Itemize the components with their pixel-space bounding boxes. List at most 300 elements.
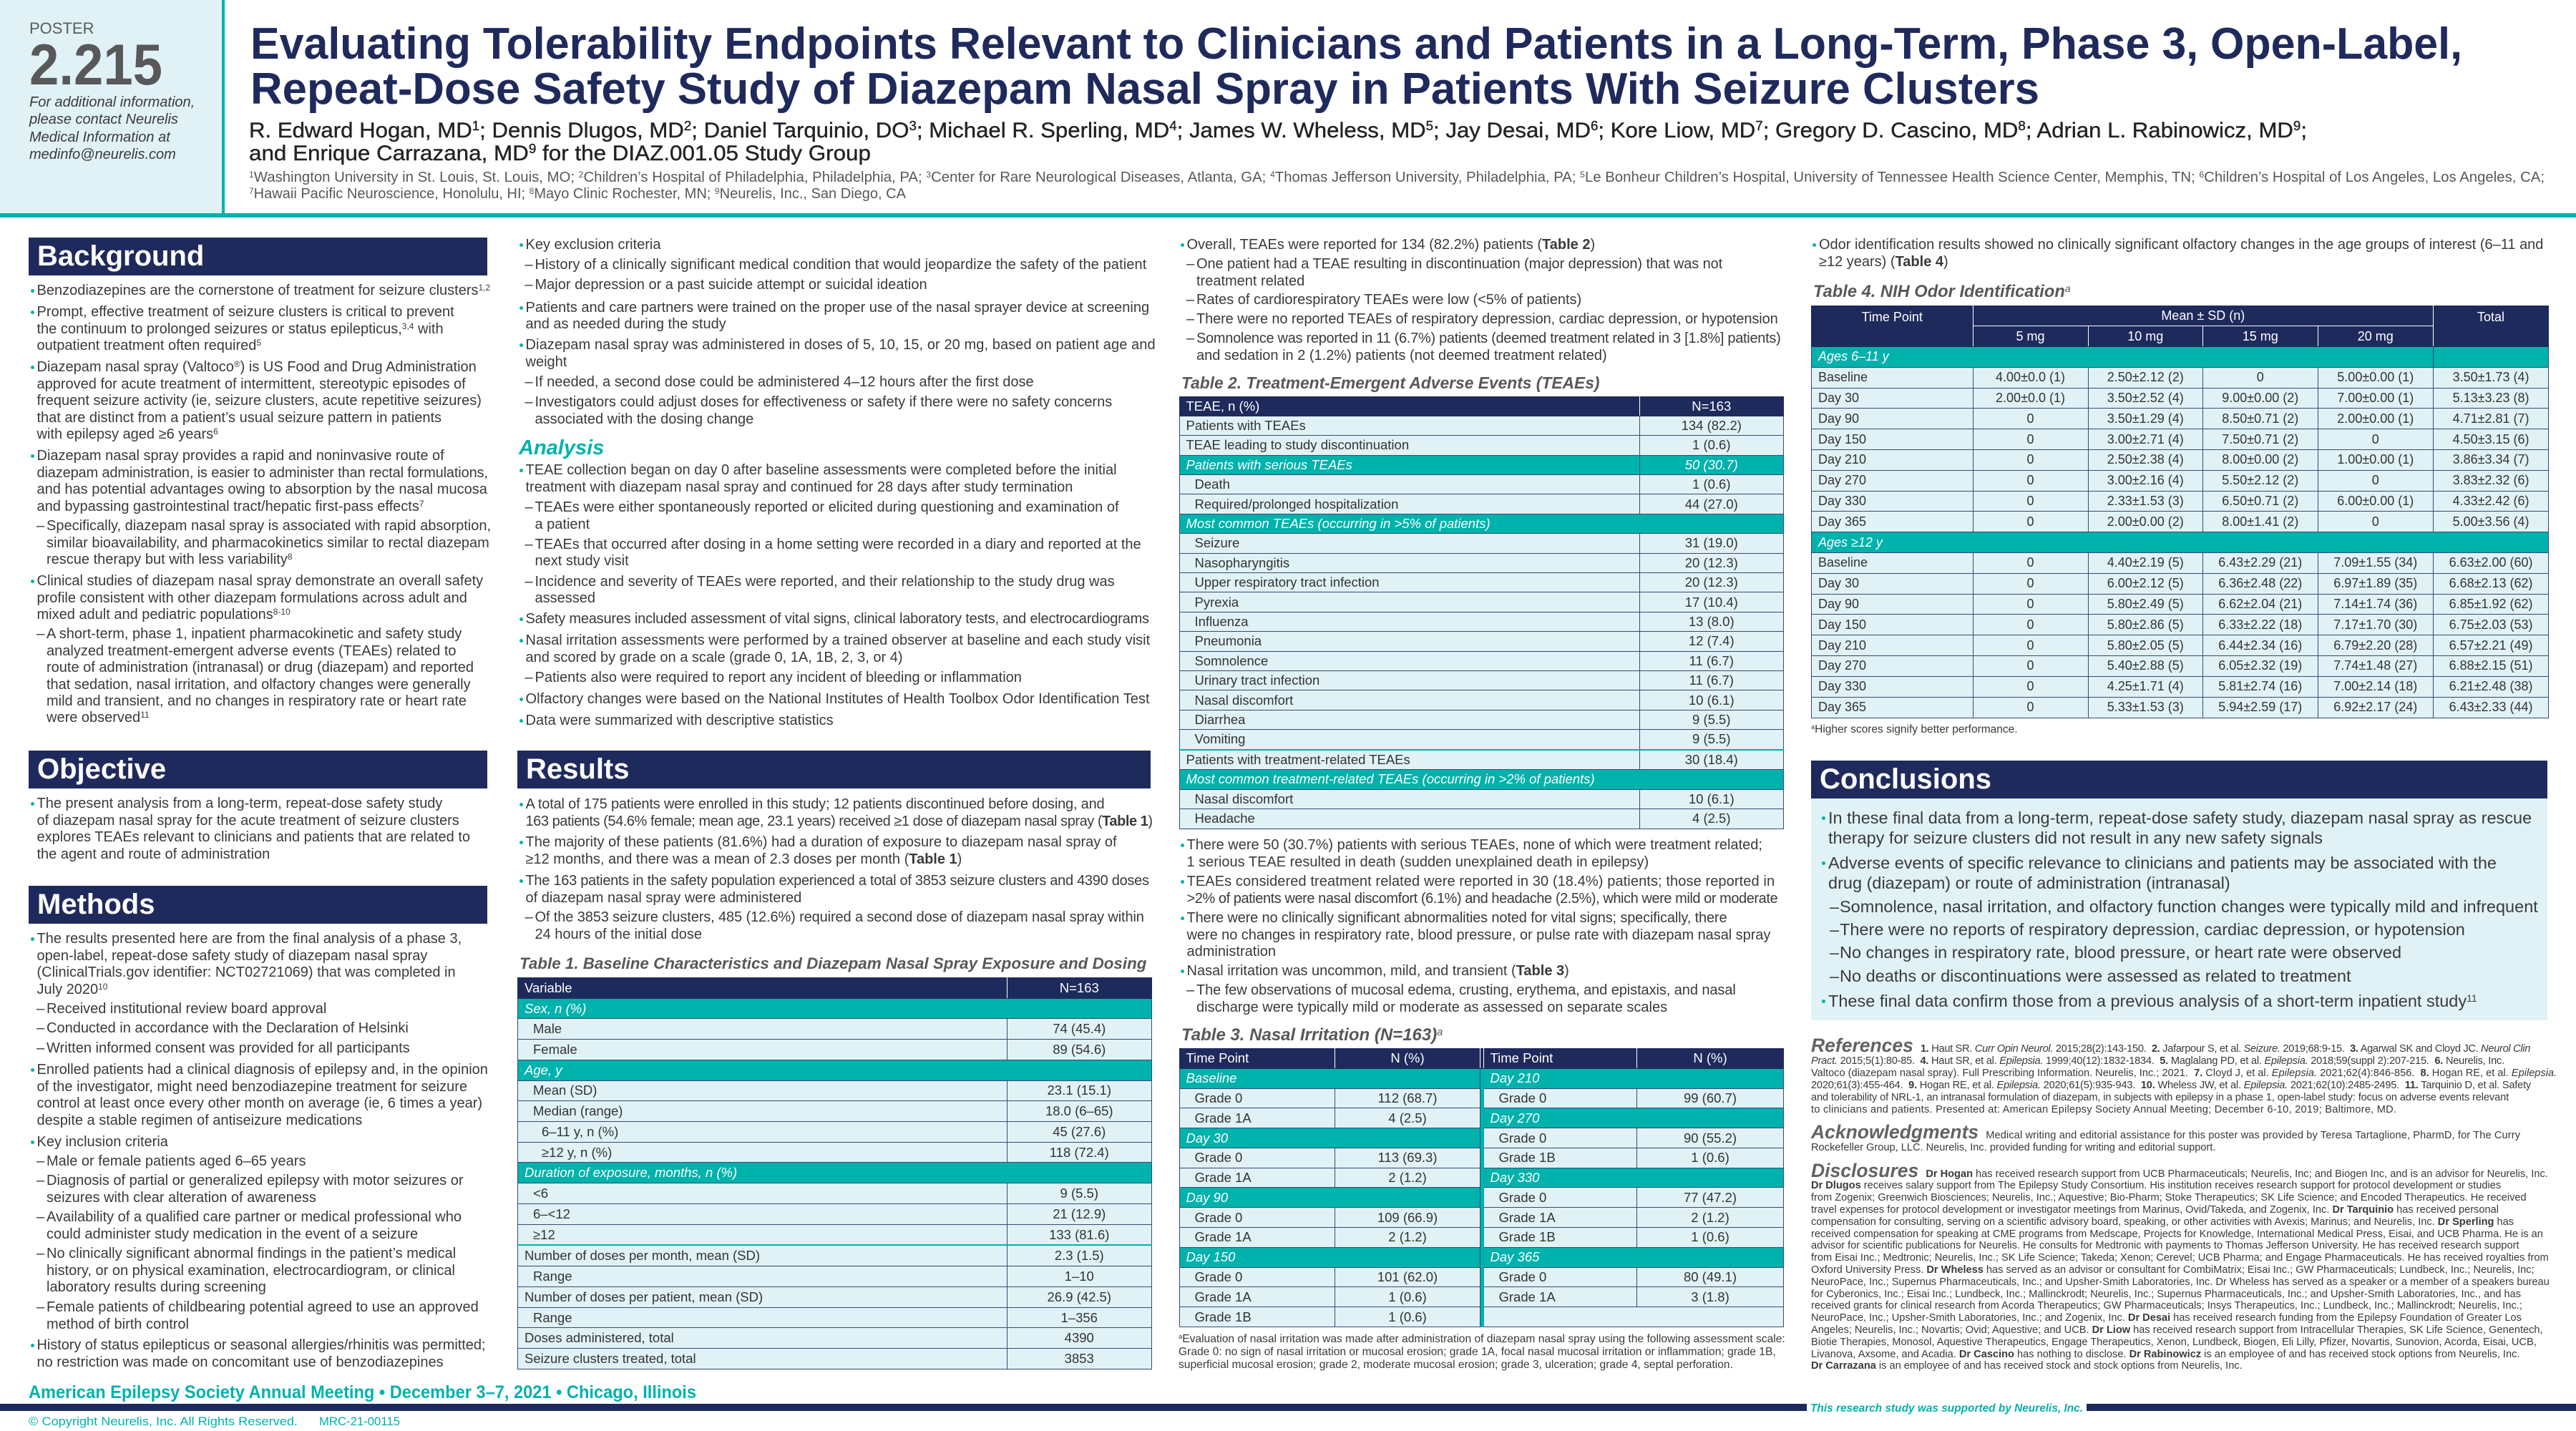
affiliations: Children’s Hospital of Los Angeles, Los Angeles, CA;: [2204, 170, 2545, 185]
table 2: TEAEs: 134 (82.2): [1682, 418, 1742, 433]
text block: Disclosures: Biotie Therapies, Monosol, Aquestive Therapeutics, Engage Therapeutics, Xenon, Lundbeck, Biogen, Eli Lilly, Pfizer, Novartis, Sunovion, Acorda, Eisai, UCB,: [1811, 1337, 2537, 1348]
text block: Background: the continuum to prolonged seizures or status epilepticus,3,4 with: [37, 321, 444, 337]
text block: Methods: laboratory results during screening: [47, 1279, 266, 1295]
text block: Analysis: Olfactory changes were based on the National Institutes of Health Toolbox Odor Identification Test: [525, 691, 1150, 707]
table 1: baseline characteristics: Number of doses per patient, mean (SD): [525, 1289, 763, 1304]
table 2: TEAEs: 4 (2.5): [1692, 811, 1730, 826]
table 1: baseline characteristics: 23.1 (15.1): [1048, 1083, 1111, 1098]
text block: TEAE overview: and sedation in 2 (1.2%) patients (not deemed treatment related): [1196, 348, 1607, 363]
table 4: NIH odor identification: 6.00±0.00 (1): [2337, 494, 2414, 508]
text block: Methods: method of birth control: [47, 1317, 189, 1332]
text block: odor identification: Odor identification results showed no clinically significant olfactory changes in the age groups of interest (6–11 and: [1819, 237, 2543, 253]
table 1: baseline characteristics: Number of doses per month, mean (SD): [525, 1248, 760, 1263]
table 4: NIH odor identification: Day 365: [1818, 700, 1866, 714]
text block: Analysis: Patients also were required to report any incident of bleeding or inflammation: [535, 670, 1022, 685]
authors: for the DIAZ.001.05 Study Group: [536, 142, 871, 165]
table 3: nasal irritation: Grade 0: [1195, 1269, 1242, 1284]
text block: Acknowledgments: Acknowledgments Medical writing and editorial assistance for this poster was provided by Teresa Tartaglione, PharmD, for The Curry: [1811, 1120, 2520, 1142]
table 3: nasal irritation: 3 (1.8): [1691, 1289, 1729, 1304]
table 3: nasal irritation: Time Point: [1490, 1050, 1553, 1065]
table 4: NIH odor identification: 6.63±2.00 (60): [2449, 555, 2533, 570]
table 4: NIH odor identification: 6.50±0.71 (2): [2222, 494, 2298, 508]
text block: TEAE details: There were no clinically significant abnormalities noted for vital signs; specifically, there: [1186, 910, 1727, 926]
text block: Methods: [31, 931, 488, 1370]
table 1: baseline characteristics: ≥12 y, n (%): [542, 1145, 612, 1160]
authors: R. Edward Hogan, MD: [249, 119, 464, 142]
text block: Background: Specifically, diazepam nasal spray is associated with rapid absorption,: [47, 518, 491, 534]
table 3: nasal irritation: Grade 0: [1498, 1269, 1546, 1284]
authors: ;: [2301, 119, 2307, 142]
table 4: NIH odor identification: Day 90: [1818, 597, 1859, 611]
text block: Background: with epilepsy aged ≥6 years6: [37, 426, 218, 442]
heading: Objective: [29, 751, 487, 788]
header text: [249, 19, 2545, 202]
table 4: NIH odor identification: 6.68±2.13 (62): [2449, 576, 2533, 590]
table 4: NIH odor identification: 4.40±2.19 (5): [2107, 555, 2184, 570]
text block: Background: approved for acute treatment of intermittent, stereotypic episodes of: [37, 376, 466, 392]
table 4: NIH odor identification: Day 330: [1818, 494, 1866, 508]
text block: Methods continued: [519, 237, 1156, 427]
table 4: NIH odor identification: Baseline: [1818, 370, 1868, 384]
table 2: TEAEs: Nasal discomfort: [1195, 791, 1293, 806]
table 4: NIH odor identification: 3.50±1.73 (4): [2453, 370, 2529, 384]
table 4: NIH odor identification: Day 330: [1818, 679, 1866, 693]
authors: ; Daniel Tarquinio, DO: [691, 119, 909, 142]
table 3: nasal irritation: 99 (60.7): [1684, 1090, 1737, 1105]
affiliations: Neurelis, Inc., San Diego, CA: [720, 186, 907, 202]
table 4: NIH odor identification: Day 150: [1818, 432, 1866, 446]
table 4: NIH odor identification: 5.94±2.59 (17): [2218, 700, 2302, 714]
table 2: TEAEs: Most common TEAEs (occurring in >5% of patients): [1186, 516, 1491, 531]
authors: 4: [1169, 119, 1177, 133]
table 3: nasal irritation: Grade 1A: [1195, 1170, 1252, 1185]
text block: References: References 1. Haut SR. Curr Opin Neurol. 2015;28(2):143-150. 2. Jafarpour S, et al. Seizure. 2019;68:9-15. 3. Agarwal SK and Cloyd JC. Neurol Clin: [1811, 1035, 2530, 1056]
table 4: NIH odor identification: 6.92±2.17 (24): [2333, 700, 2417, 714]
affiliations: 8: [530, 186, 535, 196]
authors: ; James W. Wheless, MD: [1177, 119, 1426, 142]
text block: odor identification: ≥12 years) (Table 4): [1819, 254, 1948, 270]
text block: Disclosures: Disclosures Dr Hogan has received research support from UCB Pharmaceuticals; Neurelis, Inc; and Biogen Inc, and is an advisor for Neurelis, Inc.: [1811, 1160, 2548, 1181]
table 1: baseline characteristics: 118 (72.4): [1050, 1145, 1109, 1160]
affiliations: Children’s Hospital of Philadelphia, Philadelphia, PA;: [583, 170, 926, 185]
text block: Objective: explores TEAEs relevant to clinicians and patients that are related to: [37, 829, 470, 845]
text block: TEAE overview: Rates of cardiorespiratory TEAEs were low (<5% of patients): [1196, 292, 1581, 308]
table 1: baseline characteristics: 74 (45.4): [1053, 1021, 1106, 1036]
table 4: NIH odor identification: Day 30: [1818, 391, 1859, 405]
table 1: baseline characteristics: Mean (SD): [533, 1083, 597, 1098]
text block: Disclosures: for Cyberonics, Inc.; Eisai Inc.; Lundbeck, Inc.; Mallinckrodt; Neurelis, Inc.; Supernus Pharmaceuticals, Inc.; and Upsher-Smith Laboratories, Inc., and has: [1811, 1289, 2521, 1300]
table 2: TEAEs: Patients with TEAEs: [1186, 418, 1306, 433]
table 1: baseline characteristics: 2.3 (1.5): [1055, 1248, 1104, 1263]
text block: Background: Prompt, effective treatment of seizure clusters is critical to prevent: [37, 304, 454, 320]
text block: Background: mild and transient, and no changes in respiratory rate or heart rate: [47, 693, 467, 709]
table 4: NIH odor identification: 2.50±2.38 (4): [2107, 452, 2184, 467]
text block: Results: [519, 796, 1153, 942]
text block: Methods: July 202010: [37, 982, 107, 997]
text block: Background: that sedation, nasal irritation, and olfactory changes were generally: [47, 677, 471, 693]
table 2: TEAEs: 30 (18.4): [1685, 752, 1738, 767]
table 1: baseline characteristics: 21 (12.9): [1053, 1206, 1106, 1221]
table 4: NIH odor identification: 6.33±2.22 (18): [2218, 617, 2302, 632]
table 3: nasal irritation: N (%): [1693, 1050, 1727, 1065]
table 2: TEAEs: Headache: [1195, 811, 1255, 826]
affiliations: 2: [579, 170, 584, 180]
table 4: NIH odor identification: 0: [2026, 679, 2034, 693]
table 2: TEAEs: Somnolence: [1195, 653, 1268, 668]
text block: TEAE details: There were 50 (30.7%) patients with serious TEAEs, none of which were treatment related;: [1186, 837, 1762, 853]
table 4: NIH odor identification: 5.80±2.86 (5): [2107, 617, 2184, 632]
panel: Conclusions: In these final data from a long-term, repeat-dose safety study, diazepam nasal spray as rescue: [1828, 809, 2532, 827]
text block: Background: frequent seizure activity (ie, seizure clusters, acute repetitive seizures): [37, 393, 482, 409]
table 1: baseline characteristics: Median (range): [533, 1103, 623, 1118]
table 4: NIH odor identification: 6.36±2.48 (22): [2218, 576, 2302, 590]
table 4: NIH odor identification: Baseline: [1818, 555, 1868, 570]
table 3: nasal irritation: Grade 1A: [1498, 1210, 1556, 1225]
table 1: baseline characteristics: Sex, n (%): [525, 1001, 586, 1016]
affiliations: Center for Rare Neurological Diseases, Atlanta, GA;: [931, 170, 1270, 185]
text block: Disclosures: compensation for consulting, serving on a scientific advisory board, speaking, or other activities with Avexis; Marinus; and Neurelis, Inc. Dr Sperling has: [1811, 1216, 2514, 1228]
table 4: NIH odor identification: 6.88±2.15 (51): [2449, 658, 2533, 673]
text block: Methods: Female patients of childbearing potential agreed to use an approved: [47, 1299, 479, 1315]
text block: Objective: of diazepam nasal spray for the acute treatment of seizure clusters: [37, 813, 459, 829]
table 1: baseline characteristics: <6: [533, 1186, 548, 1201]
table 4: NIH odor identification: 6.43±2.29 (21): [2218, 555, 2302, 570]
caption: Table 3: Table 3. Nasal Irritation (N=163)a: [1181, 1025, 1443, 1045]
table 4: NIH odor identification: 10 mg: [2127, 329, 2163, 343]
table 2: TEAEs: 10 (6.1): [1689, 791, 1735, 806]
table 3: nasal irritation: Grade 0: [1195, 1090, 1242, 1105]
table 3: nasal irritation: 2 (1.2): [1691, 1210, 1729, 1225]
table 1: baseline characteristics: Variable: [525, 980, 572, 995]
table 1: baseline characteristics: 89 (54.6): [1053, 1042, 1106, 1057]
text block: Disclosures: from Zogenix; Greenwich Biosciences; Neurelis, Inc.; Aquestive; Bio-Pharm; Stoke Therapeutics; SK Life Science; and Encoded Therapeutics. He received: [1811, 1192, 2527, 1203]
table 3: nasal irritation: N (%): [1390, 1050, 1425, 1065]
authors: ; Kore Liow, MD: [1598, 119, 1755, 142]
contact note: please contact Neurelis: [29, 112, 178, 127]
affiliations: Mayo Clinic Rochester, MN;: [534, 186, 715, 202]
text block: Methods: history, or on physical examination, electrocardiogram, or clinical: [47, 1263, 455, 1279]
table 1: baseline characteristics: Range: [533, 1269, 572, 1284]
authors: and Enrique Carrazana, MD: [249, 142, 517, 165]
text block: Disclosures: received grants for clinical research from Acorda Therapeutics; GW Pharmaceuticals; Insys Therapeutics, Inc.; Lundbeck, Inc.; Mallinckrodt; Neurelis, Inc.;: [1811, 1300, 2522, 1312]
table 4: NIH odor identification: 0: [2026, 576, 2034, 590]
panel: Conclusions: No deaths or discontinuations were assessed as related to treatment: [1840, 967, 2351, 985]
text block: Analysis: assessed: [535, 590, 595, 606]
table 4: NIH odor identification: 0: [2026, 432, 2034, 446]
table 3: nasal irritation: 1 (0.6): [1691, 1150, 1729, 1165]
text block: References: Pract. 2015;5(1):80-85. 4. Haut SR, et al. Epilepsia. 1999;40(12):1832-1834. 5. Maglalang PD, et al. Epilepsia. 2018;59(suppl 2):207-215. 6. Neurelis, Inc.: [1811, 1055, 2504, 1066]
text block: Background: outpatient treatment often required5: [37, 338, 261, 353]
text block: Analysis: [519, 462, 1151, 728]
table 2: TEAEs: 20 (12.3): [1685, 555, 1738, 570]
text block: Methods continued: Key exclusion criteria: [525, 237, 660, 253]
text block: References: Valtoco (diazepam nasal spray). Full Prescribing Information. Neurelis, Inc.; 2021. 7. Cloyd J, et al. Epilepsia. 2021;62(4):846-856. 8. Hogan RE, et al. Epilepsia.: [1811, 1068, 2557, 1079]
caption: Table 2: Table 2. Treatment-Emergent Adverse Events (TEAEs): [1181, 373, 1599, 392]
text block: TEAE overview: One patient had a TEAE resulting in discontinuation (major depression) that was not: [1196, 256, 1722, 272]
table 2: TEAEs: Urinary tract infection: [1195, 673, 1319, 688]
text block: Methods continued: and as needed during the study: [525, 316, 726, 332]
table 1: baseline characteristics: 26.9 (42.5): [1048, 1289, 1111, 1304]
text block: Analysis: and scored by grade on a scale (grade 0, 1A, 1B, 2, 3, or 4): [525, 650, 902, 665]
footer: copyright: © Copyright Neurelis, Inc. All Rights Reserved.: [29, 1415, 298, 1428]
table 4: NIH odor identification: Mean ± SD (n): [2161, 308, 2245, 323]
table 4: NIH odor identification: 6.62±2.04 (21): [2218, 597, 2302, 611]
table 4: NIH odor identification: Day 30: [1818, 576, 1859, 590]
authors: 9: [529, 142, 536, 156]
table 4: NIH odor identification: 6.05±2.32 (19): [2218, 658, 2302, 673]
table 3: nasal irritation: 112 (68.7): [1378, 1090, 1437, 1105]
table 4: NIH odor identification: 6.79±2.20 (28): [2333, 638, 2417, 653]
table 4: NIH odor identification: 0: [2026, 411, 2034, 426]
text block: Methods: (ClinicalTrials.gov identifier: NCT02721069) that was completed in: [37, 964, 456, 980]
table 3: nasal irritation: Day 330: [1490, 1170, 1539, 1185]
text block: Methods continued: Diazepam nasal spray was administered in doses of 5, 10, 15, or 20 mg, based on patient age and: [525, 337, 1156, 353]
table 1: baseline characteristics: ≥12: [533, 1227, 555, 1242]
caption: Table 1: Table 1. Baseline Characteristics and Diazepam Nasal Spray Exposure and Dosing: [519, 954, 1146, 972]
table 4: NIH odor identification: 3.50±1.29 (4): [2107, 411, 2184, 426]
table 3: nasal irritation: Grade 1A: [1195, 1289, 1252, 1304]
table 2: TEAEs: Required/prolonged hospitalization: [1195, 497, 1398, 512]
table 3: nasal irritation: Day 270: [1490, 1110, 1539, 1125]
table 3: nasal irritation: Day 30: [1186, 1130, 1228, 1146]
text block: TEAE details: discharge were typically mild or moderate as assessed on separate scales: [1196, 1000, 1667, 1015]
authors: 8: [2018, 119, 2026, 133]
table 4: NIH odor identification: 3.83±2.32 (6): [2453, 473, 2529, 487]
table 4: NIH odor identification: Day 210: [1818, 638, 1866, 653]
table 3: nasal irritation: 90 (55.2): [1684, 1130, 1737, 1146]
text block: Background: Diazepam nasal spray provides a rapid and noninvasive route of: [37, 448, 444, 464]
table 3: nasal irritation: 1 (0.6): [1691, 1229, 1729, 1244]
text block: Methods: Received institutional review board approval: [47, 1001, 326, 1017]
table 1: baseline characteristics: 133 (81.6): [1049, 1227, 1109, 1242]
table 4: NIH odor identification: Total: [2477, 309, 2504, 323]
contact note: [29, 94, 195, 162]
table 2: TEAEs: Nasopharyngitis: [1195, 555, 1289, 570]
text block: References: [1811, 1035, 2557, 1115]
affiliations: 7: [249, 186, 254, 196]
text block: TEAE overview: Overall, TEAEs were reported for 134 (82.2%) patients (Table 2): [1186, 237, 1595, 253]
authors: [249, 119, 2307, 165]
affiliations: 1: [249, 170, 254, 180]
text block: Results: The majority of these patients (81.6%) had a duration of exposure to diazepam nasal spray of: [525, 834, 1117, 850]
text block: Background: similar bioavailability, and pharmacokinetics similar to rectal diazepam: [47, 535, 489, 551]
authors: 6: [1591, 119, 1598, 133]
footer: funding note: This research study was supported by Neurelis, Inc.: [1810, 1402, 2083, 1415]
footnote: Table 3: [1179, 1333, 1785, 1371]
text block: Background: Diazepam nasal spray (Valtoco®) is US Food and Drug Administration: [37, 359, 477, 375]
table 2: TEAEs: 9 (5.5): [1692, 712, 1730, 727]
table 4: NIH odor identification: 0: [2257, 370, 2264, 384]
table 3: nasal irritation: [1179, 1048, 1784, 1327]
text block: Methods continued: Investigators could adjust doses for effectiveness or safety if there were no safety concerns: [535, 394, 1112, 410]
authors: ; Jay Desai, MD: [1433, 119, 1591, 142]
table 1: baseline characteristics: 1–10: [1065, 1269, 1094, 1284]
text block: TEAE overview: treatment related: [1196, 273, 1304, 289]
table 4: NIH odor identification: Day 270: [1818, 658, 1866, 673]
table 1: baseline characteristics: Age, y: [525, 1063, 562, 1078]
text block: TEAE details: TEAEs considered treatment related were reported in 30 (18.4%) patients; those reported in: [1186, 874, 1775, 889]
footer bar left: [0, 1404, 1807, 1411]
table 1: baseline characteristics: [517, 977, 1152, 1369]
table 3: nasal irritation: Grade 1B: [1498, 1229, 1556, 1244]
text block: Results: A total of 175 patients were enrolled in this study; 12 patients discontinued before dosing, and: [525, 796, 1104, 812]
table 2: TEAEs: Influenza: [1195, 614, 1249, 629]
table 4: NIH odor identification: 6.85±1.92 (62): [2449, 597, 2533, 611]
text block: Background: were observed11: [47, 710, 150, 726]
text block: TEAE details: 1 serious TEAE resulted in death (sudden unexplained death in epilepsy): [1186, 854, 1649, 870]
table 4: NIH odor identification: 8.50±0.71 (2): [2222, 411, 2298, 426]
text block: Results: 24 hours of the initial dose: [535, 927, 702, 942]
table 3: nasal irritation: Day 365: [1490, 1249, 1539, 1264]
text block: Methods: seizures with clear alteration of awareness: [47, 1190, 316, 1206]
affiliations: Hawaii Pacific Neuroscience, Honolulu, HI;: [254, 186, 530, 202]
table 4: NIH odor identification: 3.86±3.34 (7): [2453, 452, 2529, 467]
table 4: NIH odor identification: 0: [2026, 473, 2034, 487]
text block: Results: 163 patients (54.6% female; mean age, 23.1 years) received ≥1 dose of diazepam nasal spray (Table 1): [525, 814, 1153, 829]
footnote: Table 3: Grade 0: no sign of nasal irritation or mucosal erosion; grade 1A, focal nasal mucosal irritation or inflammation; grade 1B,: [1179, 1346, 1776, 1358]
table 4: NIH odor identification: 0: [2026, 494, 2034, 508]
table 2: TEAEs: 1 (0.6): [1692, 437, 1730, 452]
text block: Disclosures: NeuroPace, Inc.; Supernus Pharmaceuticals, Inc.; and Upsher-Smith Laboratories, Inc. Dr Wheless has served as a speaker or a member of a speakers bureau: [1811, 1276, 2550, 1288]
text block: Analysis: treatment with diazepam nasal spray and continued for 28 days after study termination: [525, 479, 1073, 495]
panel: Conclusions: These final data confirm those from a previous analysis of a short-term inpatient study11: [1828, 992, 2477, 1010]
table 4: NIH odor identification: 0: [2026, 514, 2034, 529]
panel: Conclusions: therapy for seizure clusters did not result in any new safety signals: [1828, 829, 2323, 847]
text block: Methods: Key inclusion criteria: [37, 1134, 168, 1150]
table 4: NIH odor identification: 7.17±1.70 (30): [2333, 617, 2417, 632]
text block: Disclosures: Oxford University Press. Dr Wheless has served as an advisor or consultant for CombiMatrix; Eisai Inc.; GW Pharmaceuticals; Lundbeck, Inc.; Neurelis, Inc;: [1811, 1264, 2534, 1276]
table 3: nasal irritation: Grade 0: [1498, 1090, 1546, 1105]
table 4: NIH odor identification: 8.00±0.00 (2): [2222, 452, 2298, 467]
text block: TEAE overview: There were no reported TEAEs of respiratory depression, cardiac depression, or hypotension: [1196, 311, 1778, 327]
table 4: NIH odor identification: 0: [2026, 617, 2034, 632]
table 3: nasal irritation: Grade 0: [1498, 1130, 1546, 1146]
table 4: NIH odor identification: 5.81±2.74 (16): [2218, 679, 2302, 693]
authors: 3: [909, 119, 917, 133]
contact note: medinfo@neurelis.com: [29, 147, 176, 162]
text block: References: and tolerability of NRL-1, an intranasal formulation of diazepam, in subjects with epilepsy in a phase 1, open-label study: focus on adverse events relevant: [1811, 1092, 2509, 1103]
table 2: TEAEs: 11 (6.7): [1689, 673, 1734, 688]
table 1: baseline characteristics: N=163: [1060, 980, 1099, 995]
table 4: NIH odor identification: 4.71±2.81 (7): [2453, 411, 2529, 426]
text block: Disclosures: advisor for scientific publications for Neurelis. He consults for Medtronic with payments to Thomas Jefferson University. He has received research support: [1811, 1240, 2519, 1251]
text block: Objective: the agent and route of administration: [37, 846, 270, 862]
text block: Analysis: TEAE collection began on day 0 after baseline assessments were completed before the initial: [525, 462, 1117, 478]
table 4: NIH odor identification: 6.43±2.33 (44): [2449, 700, 2533, 714]
text block: Analysis: next study visit: [535, 553, 629, 569]
text block: Methods continued: associated with the dosing change: [535, 411, 753, 427]
text block: Background: profile consistent with other diazepam formulations across adult and: [37, 590, 467, 606]
footer: copyright: [29, 1412, 408, 1430]
table 2: TEAEs: 1 (0.6): [1692, 477, 1730, 492]
text block: Methods: Written informed consent was provided for all participants: [47, 1040, 410, 1056]
text block: TEAE details: administration: [1186, 944, 1276, 959]
table 4: NIH odor identification: Time Point: [1862, 309, 1923, 323]
poster label: POSTER: [29, 19, 94, 37]
footnote: Table 3: superficial mucosal erosion; grade 2, moderate mucosal erosion; grade 3, ulceration; grade 4, septal perforation.: [1179, 1359, 1733, 1371]
panel: Conclusions: Somnolence, nasal irritation, and olfactory function changes were typically mild and infrequent: [1840, 897, 2538, 916]
table 4: NIH odor identification: 0: [2026, 700, 2034, 714]
affiliations: 6: [2199, 170, 2205, 180]
text block: Disclosures: Angeles; Neurelis, Inc.; Novartis; Ovid; Aquestive; and UCB. Dr Liow has received research support from Intracellular Therapies, SK Life Science, Genentech,: [1811, 1324, 2543, 1336]
text block: Disclosures: received compensation for speaking at CME programs from Medscape, Projects for Knowledge, International Medical Press, Eisai, and UCB Pharma. He is an: [1811, 1229, 2543, 1240]
text block: Disclosures: NeuroPace, Inc.; Upsher-Smith Laboratories, Inc.; and Zogenix, Inc. Dr Desai has received research funding from the Epilepsy Foundation of Greater Los: [1811, 1312, 2522, 1324]
text block: Objective: The present analysis from a long-term, repeat-dose safety study: [37, 796, 442, 811]
table 4: NIH odor identification: Day 150: [1818, 617, 1866, 632]
authors: ; Dennis Dlugos, MD: [479, 119, 684, 142]
table 4: NIH odor identification: Ages 6–11 y: [1818, 349, 1889, 363]
table 4: NIH odor identification: 6.44±2.34 (16): [2218, 638, 2302, 653]
panel: Conclusions: drug (diazepam) or route of administration (intranasal): [1828, 874, 2230, 892]
text block: Methods continued: History of a clinically significant medical condition that would jeopardize the safety of the patient: [535, 257, 1146, 273]
table 3: nasal irritation: 113 (69.3): [1378, 1150, 1437, 1165]
table 4: NIH odor identification: 0: [2026, 638, 2034, 653]
table 4: NIH odor identification: 4.33±2.42 (6): [2453, 494, 2529, 508]
table 4: NIH odor identification: 0: [2026, 597, 2034, 611]
heading: Objective: Objective: [37, 753, 166, 785]
table 1: baseline characteristics: Female: [533, 1042, 577, 1057]
affiliations: Washington University in St. Louis, St. Louis, MO;: [254, 170, 579, 185]
footer bar right: [2087, 1404, 2576, 1411]
table 2: TEAEs: Upper respiratory tract infection: [1195, 575, 1380, 590]
table 4: NIH odor identification: 8.00±1.41 (2): [2222, 514, 2298, 529]
table 1: baseline characteristics: 9 (5.5): [1060, 1186, 1098, 1201]
heading: Background: Background: [37, 240, 204, 272]
text block: Acknowledgments: [1810, 1120, 2520, 1153]
table 4: NIH odor identification: 0: [2372, 432, 2379, 446]
text block: Disclosures: from Eisai Inc.; Medtronic; Neurelis, Inc.; SK Life Science; Takeda; Xenon; Cerevel; UCB Pharma; and Engage Pharmaceuticals. He has received royalties from: [1811, 1252, 2549, 1264]
table 2: TEAEs: [1179, 396, 1784, 829]
table 4: NIH odor identification: 5 mg: [2016, 329, 2045, 343]
table 4: NIH odor identification: 6.75±2.03 (53): [2449, 617, 2533, 632]
authors: ; Gregory D. Cascino, MD: [1763, 119, 2018, 142]
table 2: TEAEs: Diarrhea: [1195, 712, 1245, 727]
table 3: nasal irritation: 109 (66.9): [1377, 1210, 1438, 1225]
table 1: baseline characteristics: Range: [533, 1310, 572, 1325]
table 3: nasal irritation: Grade 1B: [1195, 1309, 1252, 1324]
table 4: NIH odor identification: 9.00±0.00 (2): [2222, 391, 2298, 405]
table 4: NIH odor identification: Day 365: [1818, 514, 1866, 529]
text block: Background: mixed adult and pediatric populations8-10: [37, 607, 291, 622]
table 4: NIH odor identification: 5.40±2.88 (5): [2107, 658, 2184, 673]
text block: Methods continued: If needed, a second dose could be administered 4–12 hours after the first dose: [535, 374, 1034, 390]
table 2: TEAEs: 13 (8.0): [1689, 614, 1735, 629]
text block: Background: Benzodiazepines are the cornerstone of treatment for seizure clusters1,2: [37, 283, 490, 298]
table 4: NIH odor identification: 2.00±0.00 (1): [2337, 411, 2414, 426]
text block: Methods: Conducted in accordance with the Declaration of Helsinki: [47, 1020, 409, 1036]
table 2: TEAEs: 31 (19.0): [1685, 535, 1738, 550]
text block: Methods: No clinically significant abnormal findings in the patient’s medical: [47, 1246, 456, 1261]
table 4: NIH odor identification: 5.13±3.23 (8): [2453, 391, 2529, 405]
table 4: NIH odor identification: Day 210: [1818, 452, 1866, 467]
text block: Results: The 163 patients in the safety population experienced a total of 3853 seizure clusters and 4390 doses: [525, 873, 1149, 889]
table 3: nasal irritation: Day 90: [1186, 1190, 1228, 1205]
text block: Background: route of administration (intranasal) or drug (diazepam) and reported: [47, 660, 474, 675]
table 3: nasal irritation: Day 210: [1490, 1070, 1539, 1085]
affiliations: [249, 170, 2545, 202]
text block: Methods: Enrolled patients had a clinical diagnosis of epilepsy and, in the opinion: [37, 1062, 488, 1078]
text block: Methods continued: weight: [525, 354, 567, 370]
table 4: NIH odor identification: 7.09±1.55 (34): [2333, 555, 2417, 570]
table 4: NIH odor identification: 5.00±3.56 (4): [2453, 514, 2529, 529]
text block: Methods continued: Patients and care partners were trained on the proper use of the nasal sprayer device at screening: [525, 300, 1149, 316]
table 2: TEAEs: Pneumonia: [1195, 633, 1262, 648]
text block: Background: diazepam administration, is easier to administer than rectal formulations,: [37, 465, 488, 481]
text block: Methods continued: Major depression or a past suicide attempt or suicidal ideation: [535, 277, 927, 293]
panel: Conclusions: Adverse events of specific relevance to clinicians and patients may be associated with the: [1828, 854, 2497, 872]
authors: 1: [472, 119, 479, 133]
table 1: baseline characteristics: 45 (27.6): [1053, 1124, 1106, 1139]
